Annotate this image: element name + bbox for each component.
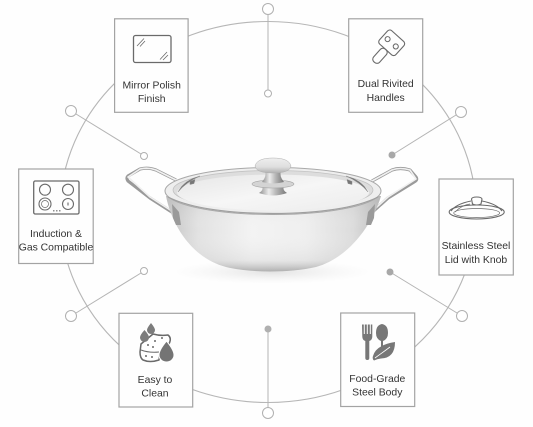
left handle highlight — [128, 168, 178, 215]
label: Mirror Polish — [123, 80, 181, 92]
icon: cooktop — [34, 181, 79, 214]
label: Handles — [367, 93, 405, 104]
label: Induction & — [30, 229, 82, 240]
knob cap — [255, 158, 291, 173]
icon: mirror — [134, 36, 171, 62]
label: Food-Grade — [349, 374, 406, 385]
label: Steel Body — [352, 388, 403, 398]
product photo: kadai with lid — [127, 158, 417, 284]
rim dark glints — [178, 176, 368, 192]
label — [358, 79, 414, 104]
knob flange — [252, 180, 294, 188]
knob lower neck — [259, 186, 287, 196]
card: Mirror Polish Finish — [115, 19, 188, 112]
card: Food-Grade Steel Body — [341, 313, 415, 406]
icon: lid — [449, 197, 504, 219]
label: Easy to — [138, 375, 173, 386]
label: Stainless Steel — [442, 241, 510, 252]
card: Dual Rivited Handles — [349, 19, 423, 112]
card: Stainless Steel Lid with Knob — [439, 179, 513, 275]
card: Easy to Clean — [119, 313, 193, 407]
connector: bottom — [262, 326, 274, 418]
right handle — [368, 168, 417, 216]
knob neck — [262, 171, 284, 184]
shadow — [172, 260, 372, 284]
label: Finish — [138, 94, 166, 105]
label: Clean — [141, 388, 169, 400]
lid dome — [177, 174, 369, 210]
left handle — [127, 168, 178, 216]
connector: top — [262, 4, 274, 97]
label — [349, 374, 406, 398]
icon: handle — [366, 29, 406, 69]
label: Lid with Knob — [445, 255, 507, 266]
rim lower band — [168, 197, 378, 214]
label — [123, 80, 181, 105]
connector: upper left — [66, 106, 148, 160]
label — [19, 229, 93, 254]
connector: lower left — [66, 268, 148, 322]
label: Dual Rivited — [358, 79, 414, 90]
label — [442, 241, 510, 266]
right handle highlight — [368, 168, 416, 215]
icon: sponge and drops — [140, 323, 174, 362]
icon: fork, spoon and leaf — [362, 324, 395, 360]
bowl — [166, 196, 381, 272]
card: Induction & Gas Compatible — [19, 169, 93, 264]
rim — [165, 168, 381, 214]
connector: lower right — [386, 268, 468, 322]
label: Gas Compatible — [19, 243, 93, 254]
rivet plates — [172, 204, 181, 225]
label — [138, 375, 173, 400]
connector: upper right — [388, 106, 466, 158]
ring outline — [60, 22, 476, 402]
lid inner rim — [173, 170, 373, 210]
